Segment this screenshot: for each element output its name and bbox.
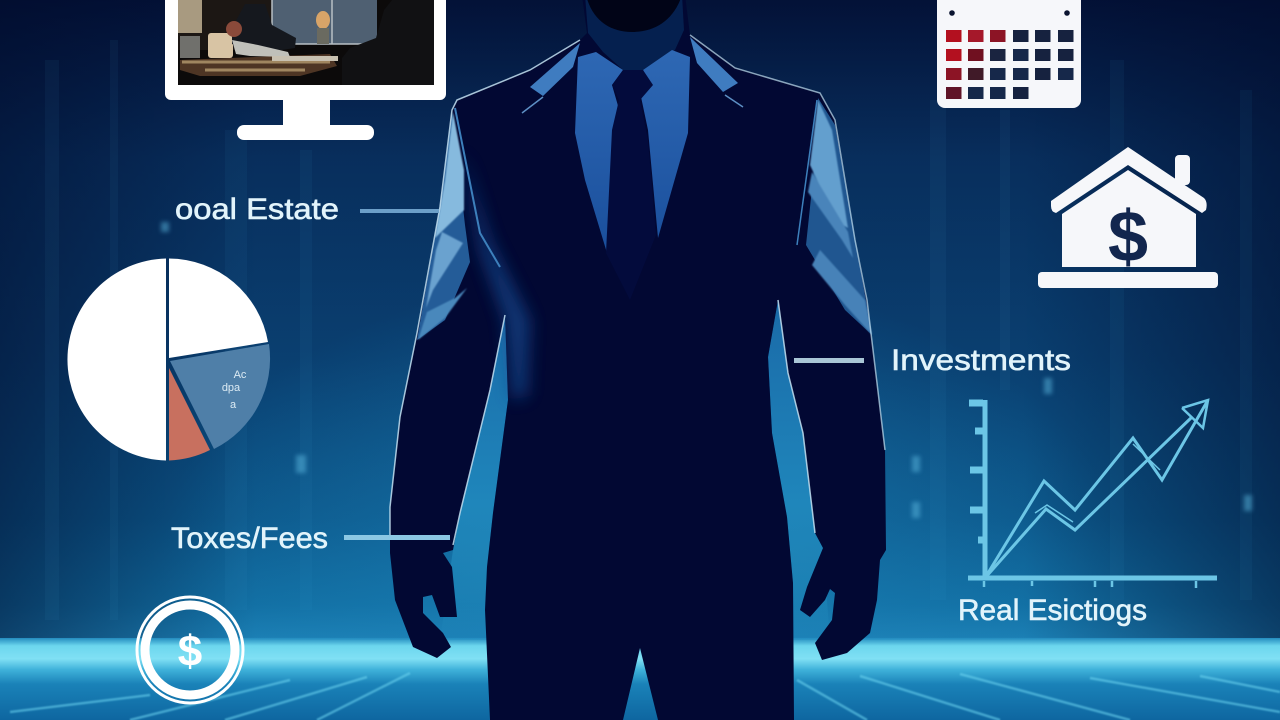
- label: real estate: ooal Estate: [175, 193, 339, 226]
- icon: house with dollar sign: [1038, 147, 1218, 288]
- shirt: [575, 50, 690, 253]
- label: real estate chart caption: Real Esictiogs: [958, 594, 1147, 627]
- label: investments: Investments: [891, 344, 1071, 377]
- pie slice label: a: [230, 399, 237, 411]
- icon: house with dollar sign: $: [1108, 197, 1148, 277]
- head shadow: [586, 0, 682, 32]
- line chart with rising arrow: [968, 400, 1217, 588]
- left sleeve base: [417, 110, 470, 340]
- connector: real estate: [360, 209, 439, 213]
- floor perspective lines: [10, 673, 1280, 720]
- icon: computer monitor with video scene: [165, 0, 446, 140]
- pie chart: [67, 258, 270, 460]
- torso glow: [462, 150, 530, 400]
- connector: taxes and fees: [344, 535, 450, 540]
- pie slice label: dpa: [222, 382, 241, 394]
- rim lines: [390, 35, 885, 545]
- tie: [606, 70, 656, 300]
- pie slice label: Ac: [234, 369, 247, 381]
- left sleeve highlights: [418, 112, 467, 340]
- figure: businessman silhouette: [390, 0, 886, 720]
- arm gaps: [440, 315, 508, 640]
- icon: dollar coin: [137, 597, 243, 703]
- label: taxes and fees: Toxes/Fees: [171, 522, 328, 555]
- right sleeve base: [806, 98, 872, 335]
- icon: dollar coin: $: [178, 627, 202, 676]
- connector: investments: [794, 358, 864, 363]
- suit body: [390, 0, 886, 720]
- icon: calendar: [937, 0, 1081, 108]
- neck: [585, 0, 684, 70]
- lapels: [530, 43, 580, 96]
- right sleeve highlights: [808, 100, 872, 335]
